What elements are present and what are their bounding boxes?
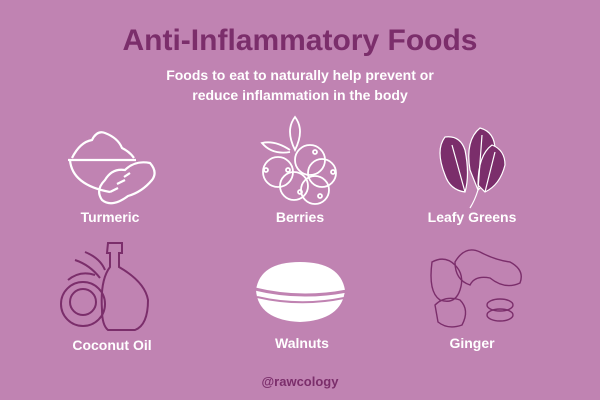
- label: ginger: Ginger: [449, 335, 495, 351]
- subtitle: Foods to eat to naturally help prevent or: [166, 67, 434, 83]
- icon: leafy greens: [440, 128, 505, 208]
- label: berries: Berries: [276, 209, 324, 225]
- title: Anti-Inflammatory Foods: [122, 24, 478, 57]
- icon: turmeric: [68, 132, 155, 203]
- footer handle: @rawcology: [262, 374, 338, 389]
- icon: berries: [262, 117, 336, 204]
- subtitle: [166, 67, 434, 103]
- icon: ginger: [431, 250, 521, 327]
- icon: walnut: [255, 262, 347, 322]
- subtitle: reduce inflammation in the body: [192, 87, 408, 103]
- label: turmeric: Turmeric: [81, 209, 139, 225]
- label: walnuts: Walnuts: [275, 335, 329, 351]
- label: coconut oil: Coconut Oil: [72, 337, 152, 353]
- icon: coconut oil: [61, 243, 148, 330]
- label: leafy greens: Leafy Greens: [428, 209, 516, 225]
